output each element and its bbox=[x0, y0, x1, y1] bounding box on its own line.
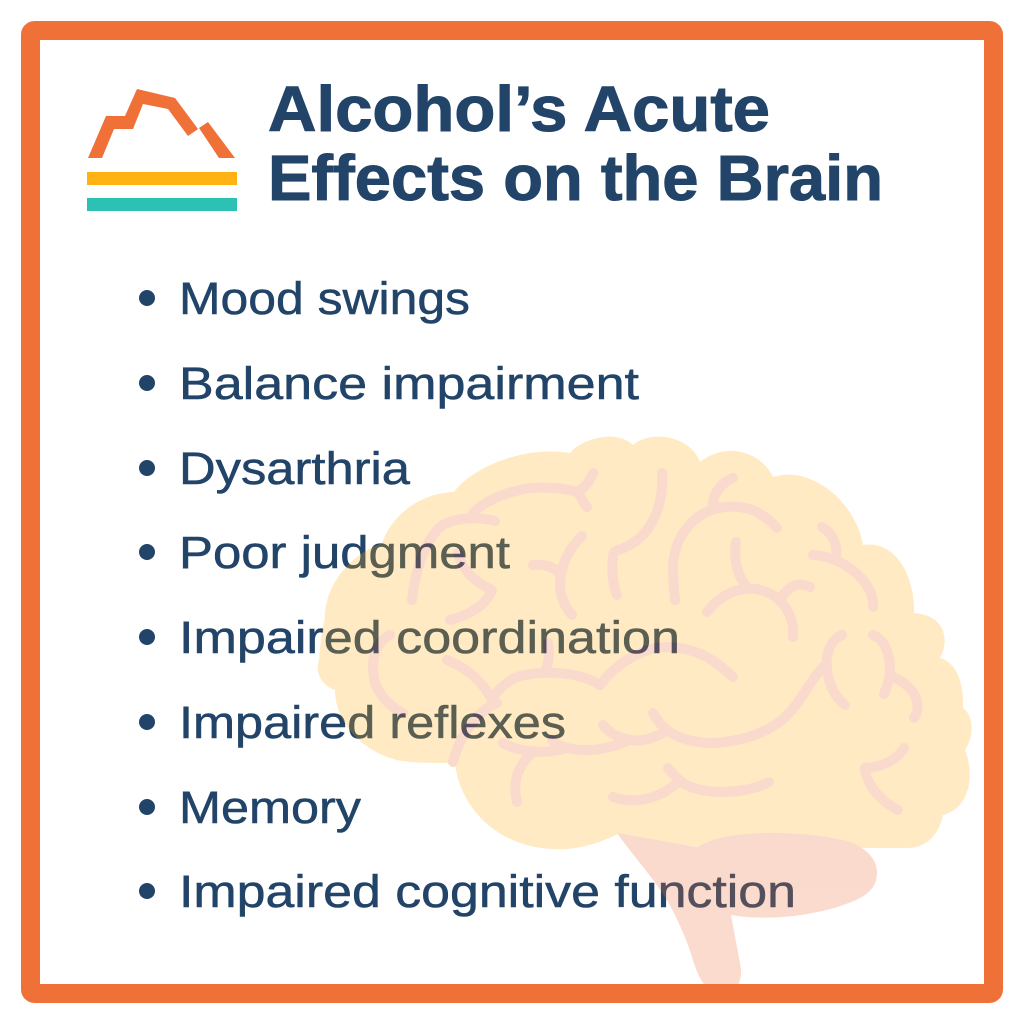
brain illustration (translucent overlay) bbox=[318, 437, 972, 986]
bullet list of acute effects: Impaired reflexes bbox=[179, 697, 566, 748]
bullet list of acute effects: Poor judgment bbox=[179, 527, 511, 578]
brain stem and cerebellum bbox=[617, 833, 877, 986]
bullet list of acute effects: Balance impairment bbox=[179, 358, 640, 409]
title: Alcohol’s Acute bbox=[268, 73, 770, 145]
bullet list of acute effects: Dysarthria bbox=[179, 443, 411, 494]
bullet list of acute effects bbox=[139, 273, 796, 917]
cortical folds bbox=[373, 473, 918, 810]
logo icon: mountain with two bars bbox=[87, 89, 237, 211]
bullet list of acute effects: Mood swings bbox=[179, 273, 470, 324]
title: Effects on the Brain bbox=[268, 142, 883, 214]
bullet list of acute effects: Memory bbox=[179, 782, 362, 833]
title bbox=[268, 73, 883, 214]
cerebrum bbox=[318, 437, 972, 849]
bullet list of acute effects: Impaired coordination bbox=[179, 612, 680, 663]
bullet list of acute effects: Impaired cognitive function bbox=[179, 866, 796, 917]
